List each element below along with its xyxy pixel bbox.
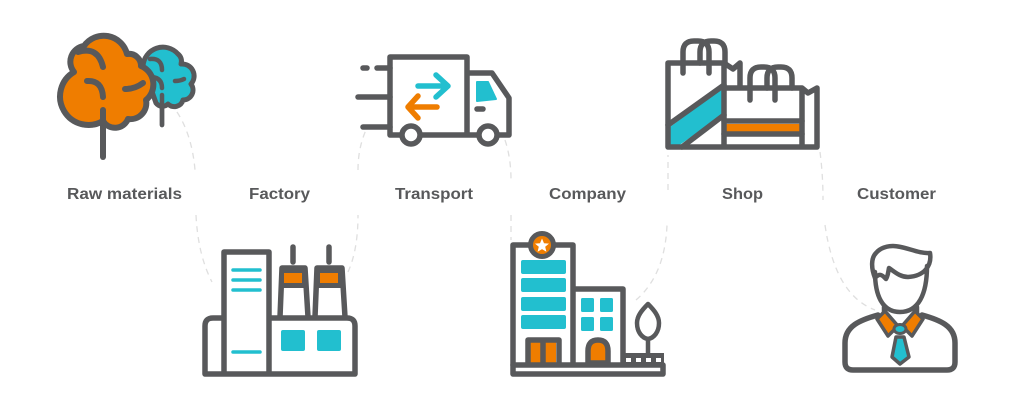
icon: factory (205, 247, 355, 374)
arrow: orange left (408, 96, 437, 118)
entrance door (528, 340, 559, 363)
label: Company: Company (549, 186, 626, 203)
small teal tree (143, 47, 194, 125)
icon: company buildings (513, 234, 664, 374)
arched door (588, 340, 608, 363)
star badge (530, 234, 554, 256)
icon: customer (845, 246, 955, 370)
label: Factory: Factory (249, 186, 310, 203)
wheels (402, 126, 497, 144)
small tree (637, 304, 659, 354)
chimneys (280, 247, 345, 317)
truck window (477, 82, 496, 101)
icon: trees (raw materials) (60, 36, 194, 157)
label: Customer: Customer (857, 186, 936, 203)
label: Raw materials: Raw materials (67, 186, 182, 203)
large orange tree (60, 36, 153, 157)
dashed connectors (177, 112, 875, 310)
label: Transport: Transport (395, 186, 473, 203)
collar (877, 311, 923, 336)
arrow: teal right (418, 75, 448, 97)
tie (892, 324, 909, 364)
icon: shopping bags (shop) (668, 41, 817, 147)
label: Shop: Shop (722, 186, 763, 203)
ground and fence (513, 353, 664, 374)
icon: delivery truck (transport) (358, 57, 509, 144)
